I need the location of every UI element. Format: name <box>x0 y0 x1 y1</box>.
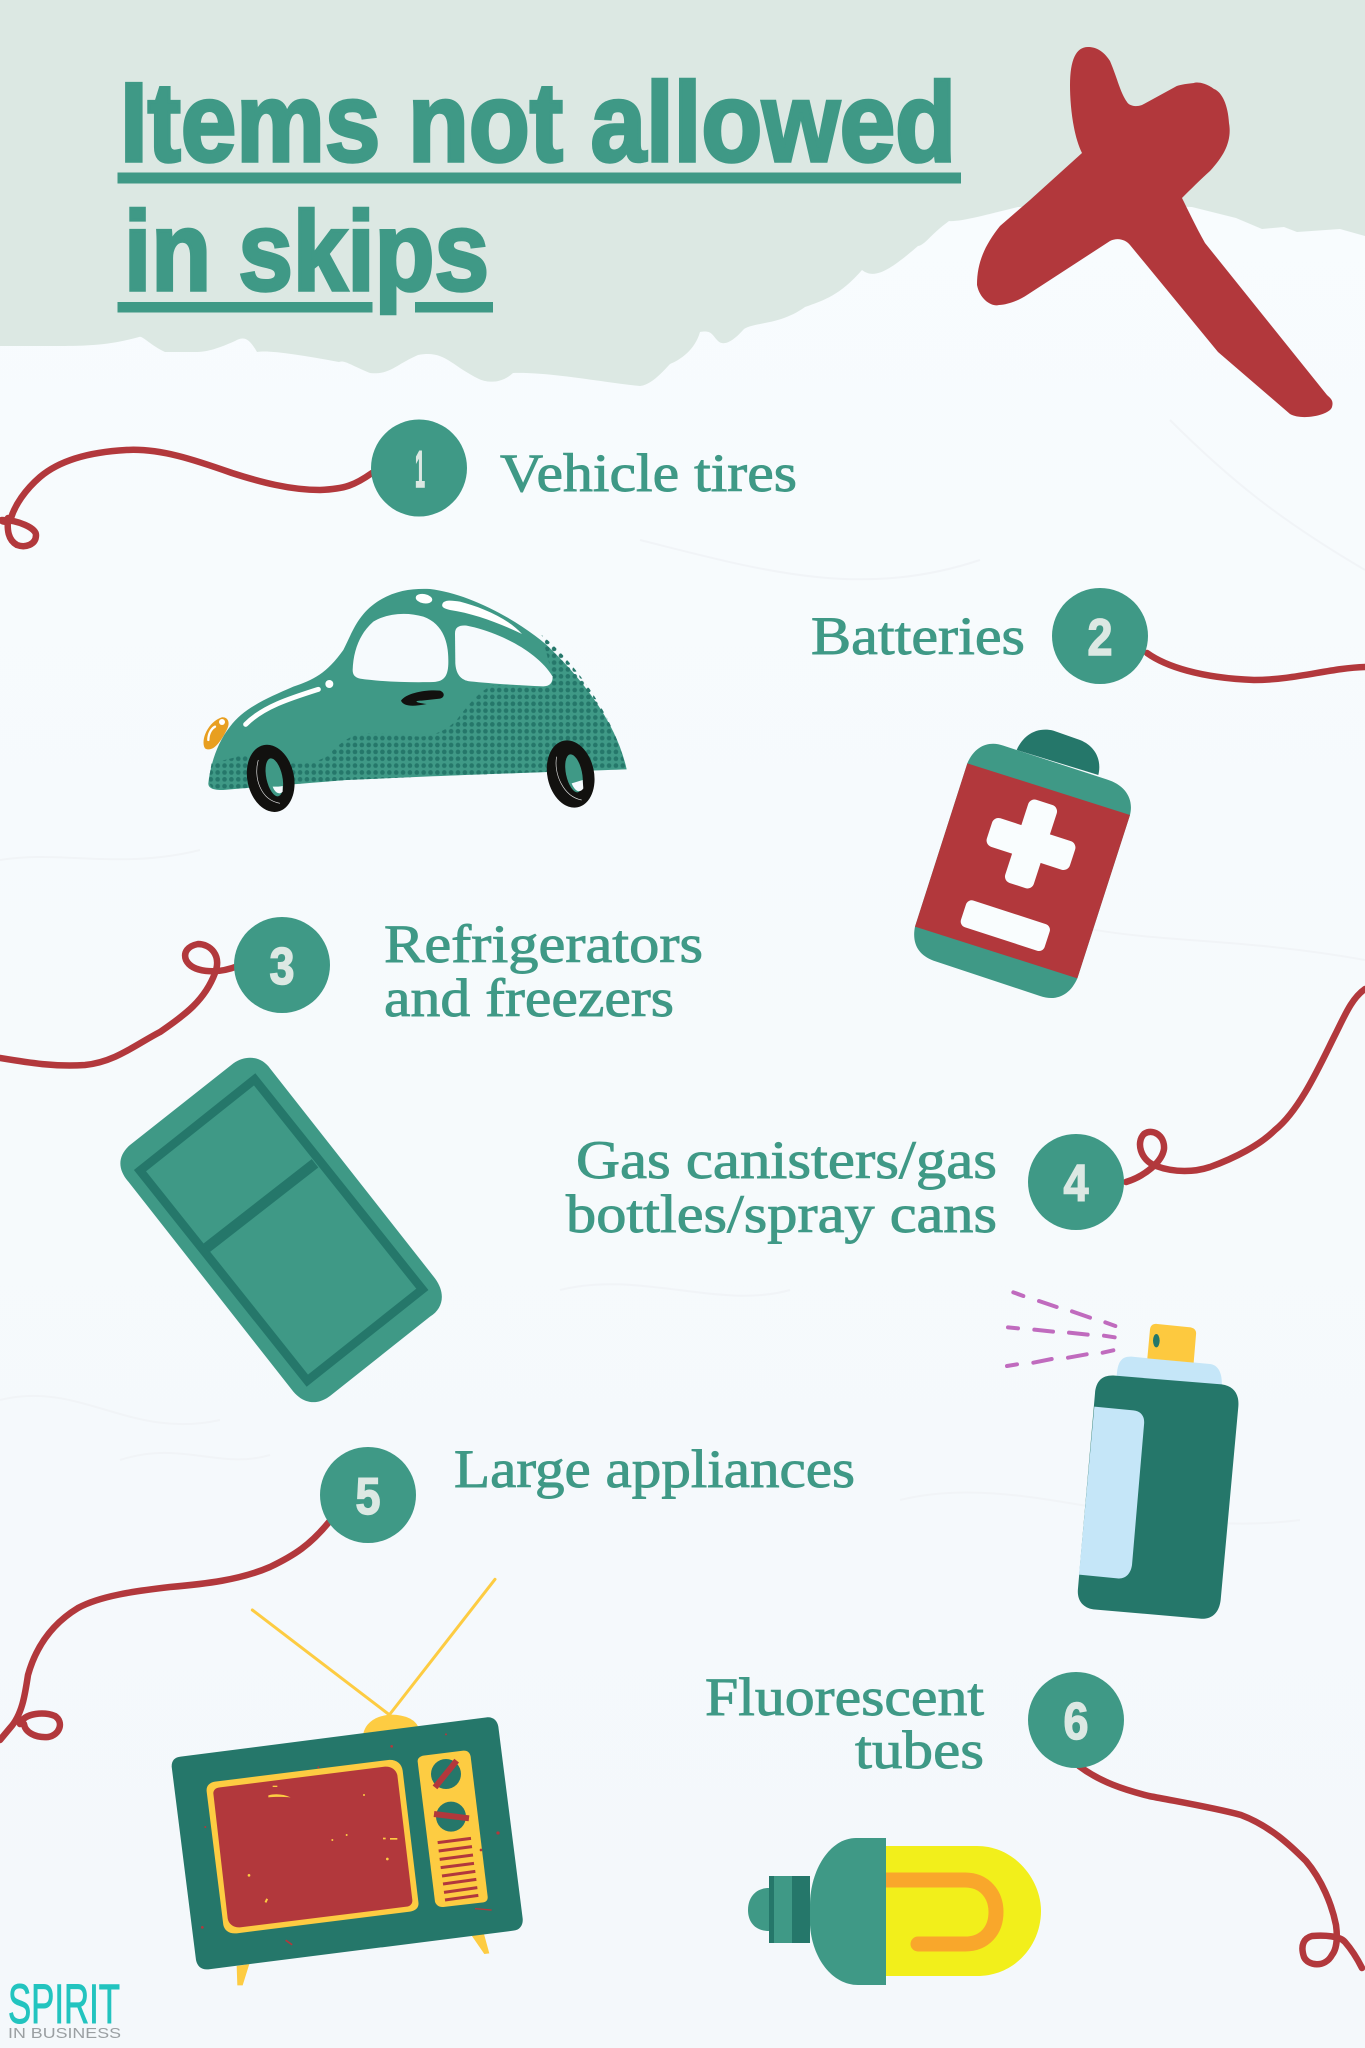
icon: refrigerator <box>120 1058 442 1402</box>
wire 2 <box>1147 653 1365 680</box>
item 1: vehicle tires <box>2 420 797 546</box>
title line 2: in skips <box>124 189 489 314</box>
wire 3 <box>0 944 238 1066</box>
label: Gas canisters/gas bottles/spray cans: Gas canisters/gas <box>576 1130 997 1190</box>
item 4: gas canisters <box>566 989 1365 1244</box>
wire 6 <box>1079 1766 1362 1968</box>
item 2: batteries <box>811 588 1365 684</box>
label: Fluorescent tubes: Fluorescent <box>705 1667 984 1727</box>
logo: Spirit in Business <box>8 1972 121 2042</box>
label: Large appliances: Large appliances <box>454 1439 855 1499</box>
title line 2 underline <box>118 302 493 312</box>
item 3: refrigerators and freezers <box>0 914 703 1066</box>
icon: spray can <box>1007 1292 1238 1619</box>
number badge 3 <box>234 917 330 1013</box>
icon: fluorescent lamp <box>748 1838 1041 1985</box>
title <box>118 60 961 314</box>
title line 1 underline <box>118 172 961 184</box>
number badge 5: 5 <box>356 1468 380 1526</box>
item 5: large appliances <box>0 1439 855 1740</box>
title line 1: Items not allowed <box>120 60 956 185</box>
number badge 4: 4 <box>1064 1155 1089 1213</box>
label: Vehicle tires: Vehicle tires <box>500 443 797 503</box>
number badge 2 <box>1052 588 1148 684</box>
label: Refrigerators and freezers <box>384 914 703 1028</box>
wire 4 <box>1126 989 1365 1182</box>
label: Refrigerators and freezers: Refrigerators <box>384 914 703 974</box>
number badge 6: 6 <box>1064 1693 1088 1751</box>
icon: car <box>204 589 627 816</box>
number badge 2: 2 <box>1088 609 1112 667</box>
label: Batteries: Batteries <box>811 606 1025 666</box>
number badge 5 <box>320 1447 416 1543</box>
logo: Spirit in Business: SPIRIT <box>8 1972 120 2035</box>
logo: Spirit in Business: IN BUSINESS <box>8 2025 121 2042</box>
number badge 3: 3 <box>270 938 294 996</box>
label: Fluorescent tubes <box>705 1667 984 1780</box>
icon: airplane <box>977 47 1333 417</box>
label: Fluorescent tubes: tubes <box>855 1720 984 1780</box>
header torn paper panel <box>0 0 1365 386</box>
icon: battery <box>914 730 1131 998</box>
number badge 4 <box>1028 1134 1124 1230</box>
label: Refrigerators and freezers: and freezers <box>384 968 674 1028</box>
label: Gas canisters/gas bottles/spray cans: bottles/spray cans <box>566 1184 997 1244</box>
label: Gas canisters/gas bottles/spray cans <box>566 1130 997 1244</box>
wire 5 <box>0 1522 329 1740</box>
number badge 1: 1 <box>415 441 425 499</box>
number badge 6 <box>1028 1672 1124 1768</box>
item 6: fluorescent tubes <box>705 1667 1362 1968</box>
wire 1 <box>2 450 372 546</box>
number badge 1 <box>371 420 467 516</box>
icon: television <box>172 1579 523 1985</box>
